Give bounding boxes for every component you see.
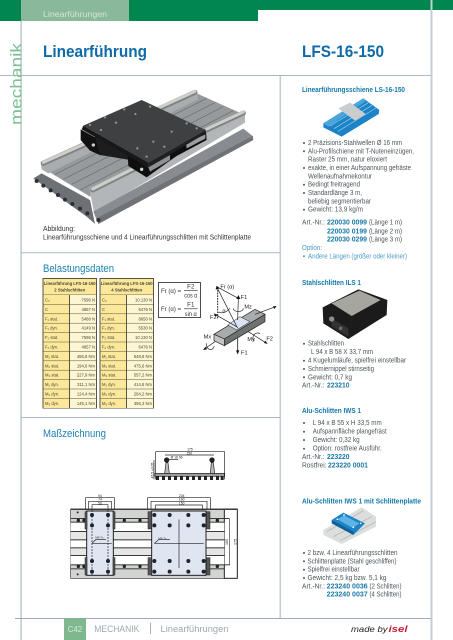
load table: 4 carriages: M₃ stat. bbox=[102, 373, 116, 378]
force diagram on guide block: F1 bbox=[241, 350, 248, 356]
dimension drawing: top view with carriages bbox=[71, 494, 237, 578]
load table: 2 carriages: M₂ dyn. bbox=[45, 392, 59, 396]
dimension drawing: top view with carriages: 74 bbox=[98, 498, 102, 502]
product photo: linear guide rail with carriage bbox=[33, 90, 253, 224]
plate carriage feature list: Art.-Nr.: bbox=[302, 583, 325, 590]
dimension drawing: top view with carriages: 150 bbox=[225, 539, 229, 545]
header tab: section name bbox=[21, 0, 129, 21]
load table: 2 carriages: C₀ bbox=[45, 298, 50, 302]
dimension drawing: top view with carriages: M6 7x bbox=[158, 536, 167, 540]
force diagram on guide block: Mz bbox=[244, 304, 252, 310]
load table: 2 carriages: 5488 N bbox=[81, 316, 95, 321]
load table: 4 carriages: 10.130 N bbox=[135, 298, 152, 302]
rail feature list: Bedingt freitragend bbox=[308, 182, 360, 189]
header tab: section name: Linearführungen bbox=[43, 10, 107, 19]
load table: 2 carriages: 4857 N bbox=[81, 307, 95, 312]
brand line: made by isel: isel bbox=[388, 624, 408, 634]
load table: 4 carriages: M₂ dyn. bbox=[102, 392, 116, 396]
load table: 4 carriages: 10.130 N bbox=[135, 335, 152, 340]
photo caption bbox=[43, 226, 251, 242]
load table: 2 carriages: 124,4 Nm bbox=[77, 392, 96, 396]
steel carriage feature list: L 94 x B 58 X 33,7 mm bbox=[311, 349, 373, 356]
title: Linearführung bbox=[43, 42, 147, 61]
load table: 4 carriages: 6476 N bbox=[138, 307, 152, 312]
alu carriage feature list bbox=[302, 420, 387, 469]
alu carriage feature list: Gewicht: 0,32 kg bbox=[313, 437, 360, 444]
brand line: made by isel bbox=[351, 624, 408, 634]
steel carriage feature list bbox=[302, 341, 407, 390]
alu carriage feature list: 223220 bbox=[327, 454, 350, 461]
heading: Belastungsdaten: Belastungsdaten bbox=[43, 263, 114, 275]
force diagram on guide block: Fr (α) bbox=[220, 285, 234, 291]
plate carriage feature list: Spielfrei einstellbar bbox=[308, 567, 360, 574]
formula box: Fr (α) = bbox=[161, 288, 181, 295]
load table: 2 carriages: 7596 N bbox=[81, 298, 95, 302]
force diagram on guide block: Mx bbox=[204, 334, 211, 340]
load table: 2 carriages: F₁ stat. bbox=[45, 316, 58, 321]
footer: page number bbox=[64, 618, 86, 640]
rail article numbers: 220030 0299 bbox=[327, 237, 367, 244]
formula box: Fr (α) = bbox=[161, 306, 181, 313]
load table: 2 carriages: 145,1 Nm bbox=[77, 401, 96, 406]
load table: 2 carriages: M₃ stat. bbox=[45, 373, 59, 378]
vertical section label: mechanik: mechanik bbox=[8, 42, 26, 125]
load table: 2 carriages: 2 Stahlschlitten bbox=[54, 288, 86, 292]
load table: 2 carriages: M₃ dyn. bbox=[45, 401, 59, 406]
rail feature list: Gewicht: 13,9 kg/m bbox=[308, 207, 363, 214]
dimension drawing: top view with carriages: 204 bbox=[179, 494, 185, 498]
rail article numbers: (Länge 1 m) bbox=[369, 220, 402, 226]
load table: 2 carriages: 4857 N bbox=[81, 344, 95, 350]
rail feature list: Wellenaufnahmekontur bbox=[308, 173, 373, 180]
plate carriage feature list: 2 bzw. 4 Linearführungsschlitten bbox=[308, 550, 398, 557]
load table: 4 carriages: 8650 N bbox=[138, 316, 152, 321]
dimension drawing: top view with carriages: 175 bbox=[233, 539, 237, 545]
force diagram on guide block: F1 bbox=[241, 295, 247, 301]
plate carriage feature list: 223240 0037 bbox=[327, 592, 368, 599]
photo caption: Linearführungsschiene und 4 Linearführungsschlitten mit Schlittenplatte bbox=[43, 234, 251, 242]
photo caption: Abbildung: bbox=[43, 226, 75, 233]
rail feature list: 2 Präzisions-Stahlwellen Ø 16 mm bbox=[308, 140, 402, 147]
force diagram on guide block: My bbox=[247, 337, 255, 343]
dimension drawing: top view with carriages: 50 bbox=[98, 501, 102, 505]
rail article numbers: 220030 0099 bbox=[327, 220, 367, 226]
steel carriage feature list: Schmiernippel stirnseitig bbox=[308, 366, 374, 373]
alu carriage feature list: 223220 0001 bbox=[328, 462, 368, 469]
steel carriage feature list: 223210 bbox=[327, 383, 350, 390]
load table: 2 carriages: 194,6 Nm bbox=[77, 363, 96, 368]
formula box: cos α bbox=[184, 292, 198, 299]
rail feature list: Standardlänge 3 m, bbox=[308, 190, 362, 197]
steel carriage feature list: Art.-Nr.: bbox=[302, 383, 325, 390]
brand line: made by isel: made by bbox=[351, 624, 388, 634]
load table: 4 carriages: M₁ dyn. bbox=[102, 382, 116, 387]
load table: 4 carriages: C bbox=[102, 307, 105, 312]
load table: 4 carriages: 5530 N bbox=[138, 326, 152, 331]
rail feature list: beliebig segmentierbar bbox=[308, 198, 372, 205]
formula box: sin α bbox=[185, 311, 197, 318]
footer: section labels: Linearführungen bbox=[160, 624, 228, 634]
dimension drawing: top view with carriages: 94 bbox=[98, 494, 102, 498]
dimension drawing: rail cross-section bbox=[150, 448, 225, 480]
rail article numbers: 220030 0199 bbox=[327, 228, 367, 235]
load table: 2 carriages: C bbox=[45, 307, 48, 312]
load table: 2 carriages bbox=[42, 278, 97, 408]
formula box bbox=[158, 282, 200, 318]
rail feature list: exakte, in einer Aufspannung gefräste bbox=[308, 165, 411, 172]
photo: steel carriage bbox=[323, 289, 387, 339]
alu carriage feature list: Art.-Nr.: bbox=[302, 454, 325, 461]
heading: rail product: Linearführungsschiene LS-16-150 bbox=[302, 85, 405, 94]
formula box: F2 bbox=[187, 284, 195, 291]
plate carriage feature list: (4 Schlitten) bbox=[370, 592, 402, 599]
load table: 2 carriages: 486,6 Nm bbox=[77, 354, 96, 359]
force diagram on guide block: α bbox=[222, 309, 226, 315]
steel carriage feature list: Gewicht: 0,7 kg bbox=[308, 374, 352, 381]
icon: blue rail bbox=[323, 98, 379, 137]
dimension drawing: rail cross-section: 175 bbox=[187, 448, 193, 452]
load table: 4 carriages: 557,2 Nm bbox=[134, 373, 153, 378]
plate carriage feature list: Gewicht: 2,5 kg bzw. 5,1 kg bbox=[308, 575, 387, 582]
load table: 4 carriages: 414,8 Nm bbox=[134, 382, 153, 387]
load table: 2 carriages: M₂ stat. bbox=[45, 363, 59, 368]
rail feature list: Raster 25 mm, natur eloxiert bbox=[308, 157, 387, 164]
alu carriage feature list: L 94 x B 55 x H 33,5 mm bbox=[313, 420, 382, 427]
force diagram on guide block: F2 bbox=[266, 336, 273, 342]
load table: 2 carriages: F₂ stat. bbox=[45, 335, 58, 340]
load table: 4 carriages: 475,6 Nm bbox=[134, 363, 153, 368]
alu carriage feature list: Aufspannfläche plangefräst bbox=[313, 429, 387, 436]
plate carriage feature list: (2 Schlitten) bbox=[370, 583, 402, 590]
load table: 4 carriages: 648,8 Nm bbox=[134, 354, 153, 359]
load table: 4 carriages: 4 Stahlschlitten bbox=[111, 288, 143, 292]
dimension drawing: top view with carriages: 150 bbox=[179, 501, 185, 505]
load table: 2 carriages: 4149 N bbox=[81, 326, 95, 331]
icon: blue plate on rail bbox=[323, 507, 376, 544]
heading: Maßzeichnung: Maßzeichnung bbox=[43, 428, 106, 440]
footer: section labels bbox=[94, 623, 228, 634]
alu carriage feature list: Option: rostfreie Ausführ. bbox=[313, 446, 382, 453]
load table: 2 carriages: 7596 N bbox=[81, 335, 95, 340]
product code title: LFS-16-150 bbox=[302, 42, 384, 61]
load table: 4 carriages bbox=[100, 278, 154, 408]
plate carriage feature list: 223240 0036 bbox=[327, 583, 368, 590]
rail article numbers: Andere Längen (größer oder kleiner) bbox=[308, 253, 407, 260]
load table: 4 carriages: Linearführung LFS-16-150 bbox=[101, 281, 153, 286]
plate carriage feature list: Schlittenplatte (Stahl geschliffen) bbox=[308, 558, 396, 565]
load table: 4 carriages: 6476 N bbox=[138, 344, 152, 350]
load table: 2 carriages: Linearführung LFS-16-150 bbox=[44, 281, 96, 286]
rail article numbers: (Länge 2 m) bbox=[369, 228, 402, 235]
footer: page number: C42 bbox=[68, 625, 83, 634]
dimension drawing: top view with carriages: 180 bbox=[179, 498, 185, 502]
heading: alu carriage with plate: Alu-Schlitten IWS 1 mit Schlittenplatte bbox=[302, 496, 421, 505]
dimension drawing: rail cross-section: 150 bbox=[187, 452, 192, 456]
load table: 2 carriages: F₁ dyn. bbox=[45, 326, 58, 331]
dimension drawing: top view with carriages: M6 7x bbox=[95, 536, 104, 540]
load table: 4 carriages: C₀ bbox=[102, 298, 107, 302]
load table: 2 carriages: 311,1 Nm bbox=[77, 382, 96, 387]
rail feature list bbox=[303, 140, 414, 214]
steel carriage feature list: Stahlschlitten bbox=[308, 341, 344, 348]
load table: 2 carriages: M₁ dyn. bbox=[45, 382, 59, 387]
footer: section labels: MECHANIK bbox=[94, 624, 139, 634]
heading: alu carriage: Alu-Schlitten IWS 1 bbox=[302, 406, 361, 415]
formula box: F1 bbox=[187, 302, 195, 309]
load table: 2 carriages: 227,9 Nm bbox=[77, 373, 96, 378]
rail article numbers: (Länge 3 m) bbox=[369, 237, 402, 244]
force diagram on guide block: F2 bbox=[210, 315, 217, 321]
load table: 4 carriages: F₁ dyn. bbox=[102, 326, 115, 331]
alu carriage feature list: Rostfrei: bbox=[302, 462, 327, 469]
load table: 4 carriages: M₂ stat. bbox=[102, 363, 116, 368]
plate carriage feature list bbox=[302, 550, 402, 599]
load table: 4 carriages: 284,2 Nm bbox=[134, 392, 153, 396]
rail article numbers: Art.-Nr.: bbox=[302, 220, 325, 226]
heading: steel carriage: Stahlschlitten ILS 1 bbox=[302, 278, 361, 287]
load table: 4 carriages: M₁ stat. bbox=[102, 354, 116, 359]
load table: 2 carriages: M₁ stat. bbox=[45, 354, 59, 359]
rail article numbers bbox=[302, 220, 407, 260]
rail feature list: Alu-Profilschiene mit T-Nuteneinzügen, bbox=[308, 148, 414, 155]
load table: 4 carriages: M₃ dyn. bbox=[102, 401, 116, 406]
load table: 2 carriages: F₂ dyn. bbox=[45, 344, 58, 350]
load table: 4 carriages: F₂ stat. bbox=[102, 335, 115, 340]
load table: 4 carriages: F₂ dyn. bbox=[102, 344, 115, 350]
load table: 4 carriages: 356,3 Nm bbox=[134, 401, 153, 406]
steel carriage feature list: 4 Kugelumläufe, spielfrei einstellbar bbox=[308, 358, 407, 365]
header band bbox=[0, 0, 453, 21]
dimension drawing: rail cross-section: 45,5 ±0,05 bbox=[150, 462, 154, 478]
rail article numbers: Option: bbox=[302, 245, 322, 252]
force diagram on guide block bbox=[203, 285, 277, 356]
load table: 4 carriages: F₁ stat. bbox=[102, 316, 115, 321]
dimension drawing: rail cross-section: Ø 16 h6 bbox=[171, 455, 183, 459]
